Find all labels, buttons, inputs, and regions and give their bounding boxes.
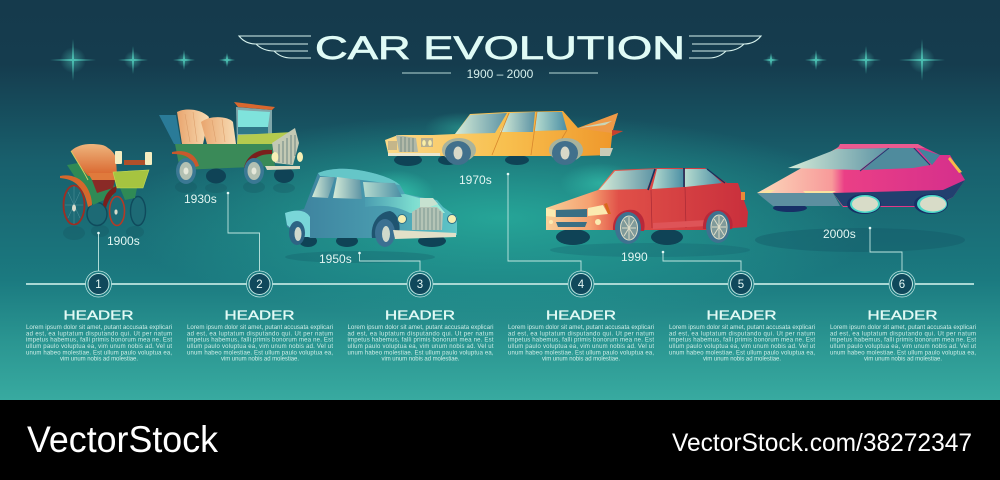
text block 3: ad est, ea luptatum disputando qui. Ut per natum <box>348 331 494 337</box>
year labels: 1900s <box>107 234 140 248</box>
car: 1990 hatchback <box>546 163 750 257</box>
background glow <box>120 113 880 323</box>
text block 5 <box>669 308 815 363</box>
connector 3 <box>358 252 420 271</box>
car: 1900s carriage <box>60 144 152 240</box>
car: 1970s fin sedan <box>385 111 623 166</box>
subtitle: 1900 – 2000 <box>467 67 534 81</box>
year labels: 1930s <box>184 192 217 206</box>
text block 3: unum habeo molestiae. Est ullum paulo voluptua ea, <box>348 350 494 356</box>
year labels: 1990 <box>621 250 648 264</box>
text block 3: ullum paulo voluptua ea, vim unum nobis ad. Vel ut <box>348 344 494 350</box>
text block 2: unum habeo molestiae. Est ullum paulo voluptua ea, <box>187 350 333 356</box>
marker 6: 6 <box>899 279 905 291</box>
connector 5 <box>662 251 741 271</box>
connector 4 <box>507 173 581 271</box>
text block 4: impetus habemus, falli primis bonorum mea ne. Est <box>508 338 654 344</box>
stars left <box>50 39 235 81</box>
text block 1: HEADER <box>64 308 134 322</box>
text block 2: impetus habemus, falli primis bonorum mea ne. Est <box>187 338 333 344</box>
year labels <box>107 173 856 266</box>
marker 5 <box>728 271 754 297</box>
text block 5: Lorem ipsum dolor sit amet, putant accusata explicari <box>669 325 815 331</box>
text block 1: unum habeo molestiae. Est ullum paulo voluptua ea, <box>26 350 172 356</box>
text block 5: HEADER <box>706 308 776 322</box>
text block 4: ullum paulo voluptua ea, vim unum nobis ad. Vel ut <box>508 344 654 350</box>
text block 3: HEADER <box>385 308 455 322</box>
text block 6: vim unum nobis ad molestiae. <box>864 357 942 363</box>
text block 2: HEADER <box>224 308 294 322</box>
text block 3: vim unum nobis ad molestiae. <box>382 357 460 363</box>
car: 1930s open tourer <box>159 102 303 193</box>
stars right <box>763 39 945 81</box>
text block 6: unum habeo molestiae. Est ullum paulo voluptua ea, <box>830 350 976 356</box>
marker 4: 4 <box>578 279 585 291</box>
footer band: VectorStock.com/38272347 <box>672 429 972 457</box>
text block 2: ad est, ea luptatum disputando qui. Ut per natum <box>187 331 333 337</box>
marker 4 <box>568 271 594 297</box>
year labels: 2000s <box>823 227 856 241</box>
text block 6 <box>830 308 976 363</box>
title: CAR EVOLUTION <box>315 30 685 66</box>
left wing <box>239 36 311 58</box>
text block 3: Lorem ipsum dolor sit amet, putant accusata explicari <box>348 325 494 331</box>
footer band: VectorStock <box>27 419 218 460</box>
text block 6: ad est, ea luptatum disputando qui. Ut per natum <box>830 331 976 337</box>
text block 2: vim unum nobis ad molestiae. <box>221 357 299 363</box>
marker 5: 5 <box>738 279 744 291</box>
marker 1: 1 <box>95 279 102 291</box>
marker 3 <box>407 271 433 297</box>
year labels: 1950s <box>319 252 352 266</box>
text block 4: vim unum nobis ad molestiae. <box>542 357 620 363</box>
right wing <box>689 36 761 58</box>
text block 5: impetus habemus, falli primis bonorum mea ne. Est <box>669 338 815 344</box>
text block 4: unum habeo molestiae. Est ullum paulo voluptua ea, <box>508 350 654 356</box>
marker 1 <box>86 271 112 297</box>
marker 3: 3 <box>417 279 423 291</box>
connector 6 <box>869 227 902 271</box>
text block 6: HEADER <box>868 308 938 322</box>
text block 2 <box>187 308 333 363</box>
text block 6: impetus habemus, falli primis bonorum mea ne. Est <box>830 338 976 344</box>
text block 4 <box>508 308 654 363</box>
car: 1950s sedan <box>285 169 457 263</box>
text block 3: impetus habemus, falli primis bonorum mea ne. Est <box>348 338 494 344</box>
text block 1 <box>26 308 172 363</box>
text block 1: vim unum nobis ad molestiae. <box>60 357 138 363</box>
timeline axis <box>26 283 974 285</box>
text block 2: Lorem ipsum dolor sit amet, putant accusata explicari <box>187 325 333 331</box>
text block 1: impetus habemus, falli primis bonorum mea ne. Est <box>26 338 172 344</box>
text block 6: Lorem ipsum dolor sit amet, putant accusata explicari <box>830 325 976 331</box>
text block 4: ad est, ea luptatum disputando qui. Ut per natum <box>508 331 654 337</box>
text block 5: unum habeo molestiae. Est ullum paulo voluptua ea, <box>669 350 815 356</box>
marker 6 <box>889 271 915 297</box>
text block 5: vim unum nobis ad molestiae. <box>703 357 781 363</box>
text block 5: ad est, ea luptatum disputando qui. Ut per natum <box>669 331 815 337</box>
connector 2 <box>227 192 260 271</box>
marker 2 <box>246 271 272 297</box>
text block 1: ullum paulo voluptua ea, vim unum nobis ad. Vel ut <box>26 344 172 350</box>
car: 2000s hover concept <box>755 144 965 252</box>
footer band <box>0 400 1000 480</box>
text block 1: Lorem ipsum dolor sit amet, putant accusata explicari <box>26 325 172 331</box>
text block 1: ad est, ea luptatum disputando qui. Ut per natum <box>26 331 172 337</box>
text block 2: ullum paulo voluptua ea, vim unum nobis ad. Vel ut <box>187 344 333 350</box>
text block 6: ullum paulo voluptua ea, vim unum nobis ad. Vel ut <box>830 344 976 350</box>
text block 5: ullum paulo voluptua ea, vim unum nobis ad. Vel ut <box>669 344 815 350</box>
year labels: 1970s <box>459 173 492 187</box>
connector 1 <box>97 232 100 271</box>
text block 4: Lorem ipsum dolor sit amet, putant accusata explicari <box>508 325 654 331</box>
marker 2: 2 <box>256 279 263 291</box>
text block 3 <box>348 308 494 363</box>
text block 4: HEADER <box>546 308 616 322</box>
